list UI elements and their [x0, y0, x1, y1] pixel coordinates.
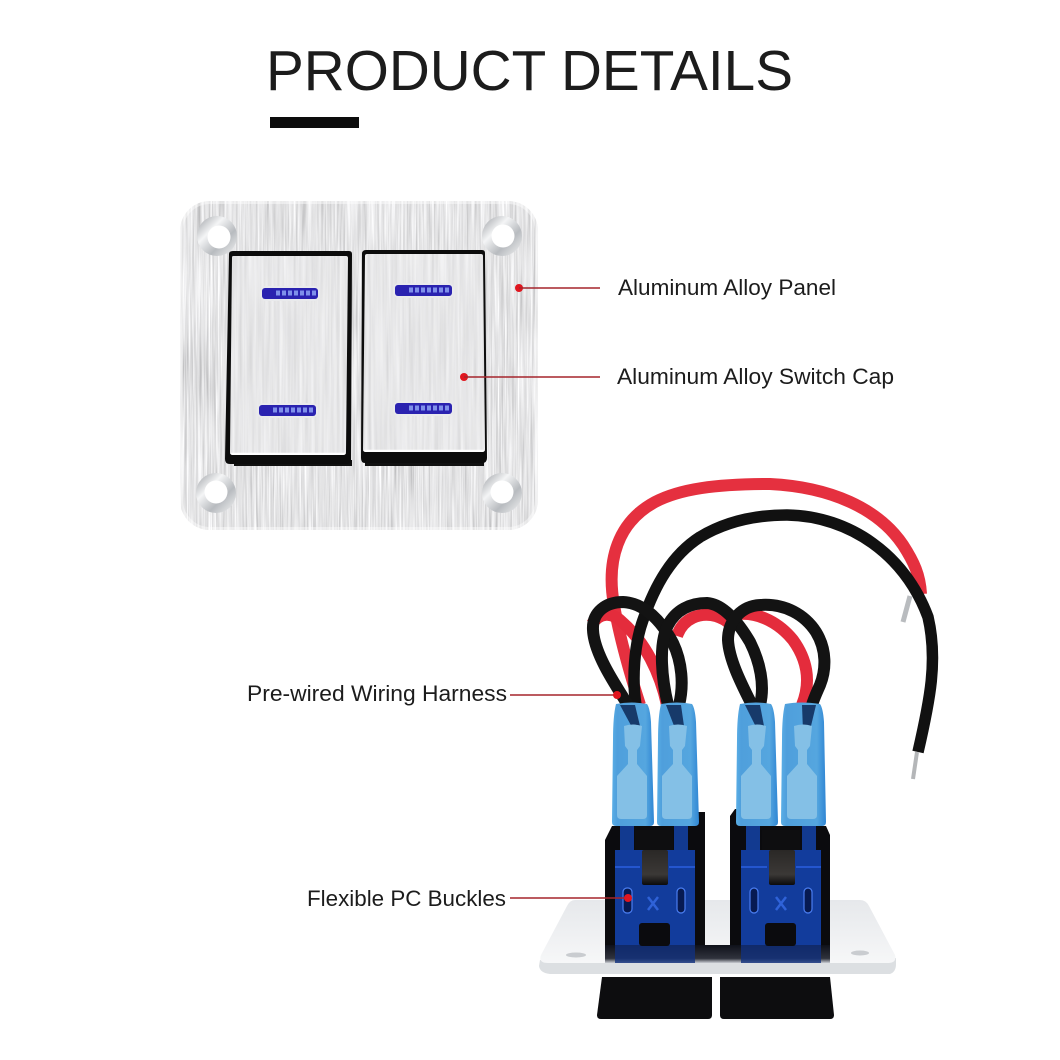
bottom switch cap: left — [597, 977, 712, 1019]
black long wire — [634, 515, 933, 752]
panel: wiring harness and rear view — [539, 484, 933, 1019]
metal mounting plate — [539, 900, 896, 974]
red wire loops — [592, 614, 807, 705]
blue connector 2 — [657, 702, 699, 826]
blue connector 4 — [781, 702, 826, 826]
indicator slot — [393, 283, 454, 298]
red long wire — [612, 484, 921, 705]
panel: aluminum switch plate, front view — [180, 201, 538, 530]
stripped wire end: black wire — [913, 752, 917, 779]
callout: aluminum alloy switch cap: Aluminum Alloy Switch Cap — [617, 364, 894, 389]
title: PRODUCT DETAILS — [266, 39, 793, 103]
title underline bar — [270, 117, 359, 128]
brushed aluminum plate — [180, 201, 538, 530]
mounting hole: bottom right — [482, 473, 522, 513]
blue connector 1 — [612, 702, 654, 826]
mounting hole: top right — [482, 216, 522, 256]
switch body: right — [730, 809, 830, 963]
blue connector 3 — [736, 702, 778, 826]
black wire loops — [593, 602, 824, 705]
callout: aluminum alloy switch cap — [460, 364, 894, 389]
callout: flexible pc buckles — [307, 886, 632, 911]
rocker switch: left — [225, 251, 352, 466]
indicator slot — [260, 286, 320, 301]
switch body: left — [605, 812, 705, 963]
callout: pre-wired wiring harness — [247, 681, 621, 706]
callout: aluminum alloy panel — [515, 275, 836, 300]
rocker switch: right — [361, 250, 487, 466]
indicator slot — [393, 401, 454, 416]
stripped wire end: red wire — [903, 596, 910, 622]
bottom switch cap: right — [720, 977, 834, 1019]
mounting hole: top left — [197, 216, 237, 256]
indicator slot — [257, 403, 318, 418]
callout: aluminum alloy panel: Aluminum Alloy Panel — [618, 275, 836, 300]
callout: flexible pc buckles: Flexible PC Buckles — [307, 886, 506, 911]
callout: pre-wired wiring harness: Pre-wired Wiring Harness — [247, 681, 507, 706]
mounting hole: bottom left — [196, 473, 236, 513]
